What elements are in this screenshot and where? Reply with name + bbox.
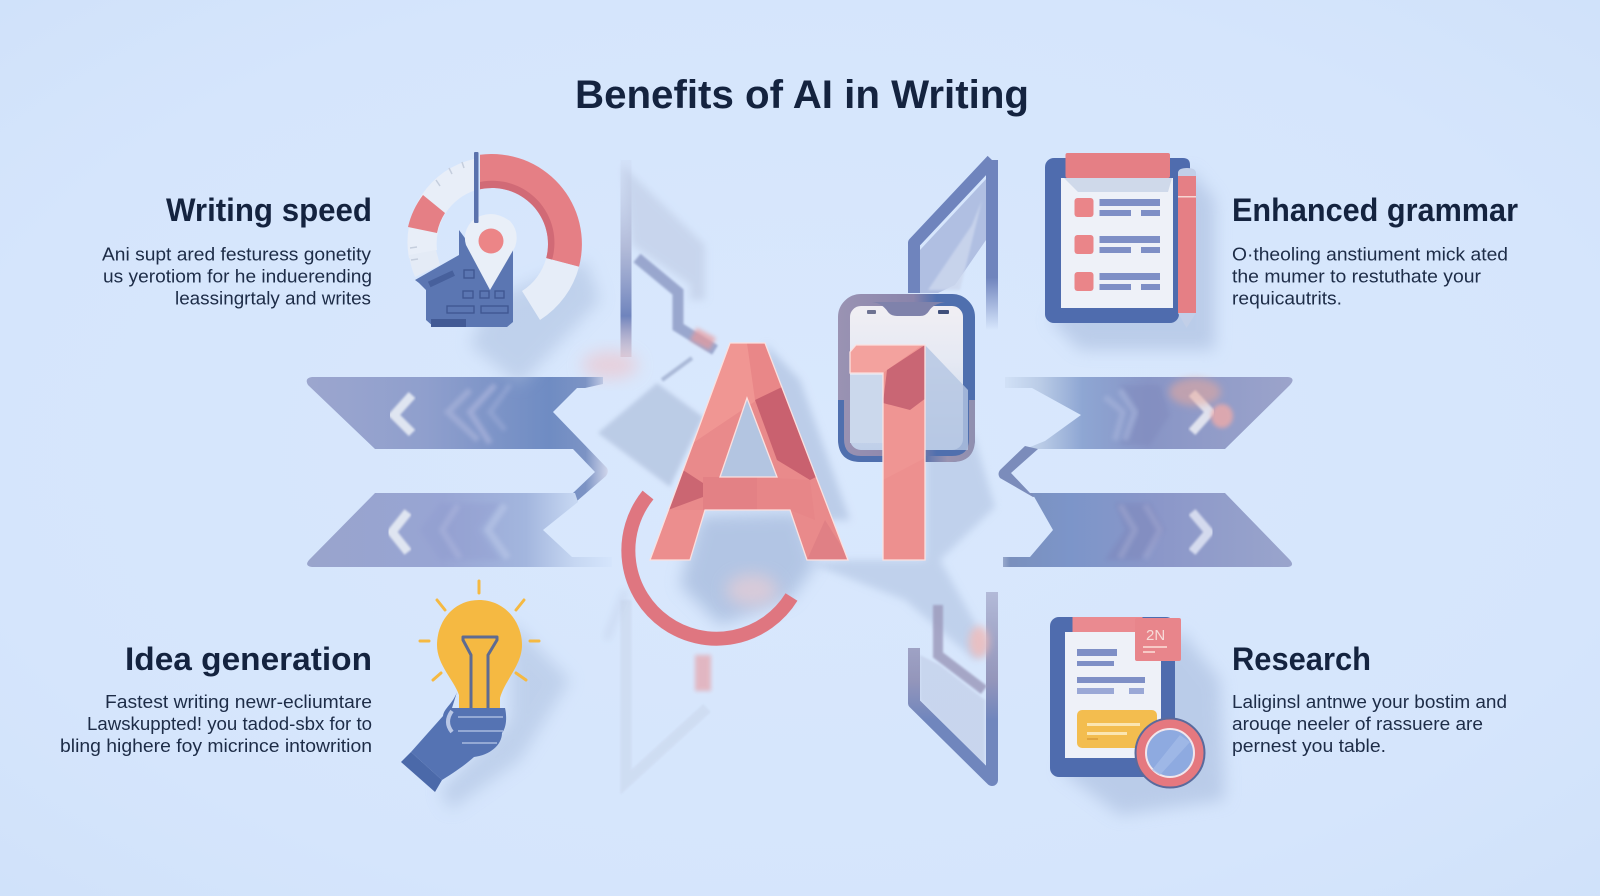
hand — [401, 692, 506, 792]
central diagram — [307, 160, 1293, 782]
checklist row 3 — [1074, 272, 1160, 291]
heading: Enhanced grammar — [1232, 192, 1518, 228]
bulb — [437, 600, 522, 710]
pencil — [1178, 168, 1196, 328]
description: arouqe neeler of rassuere are — [1232, 714, 1483, 734]
checklist row 1 — [1074, 198, 1160, 217]
map pin — [465, 214, 517, 290]
rays — [420, 581, 539, 680]
chevrons bottom right — [1105, 503, 1209, 560]
numeral 1 — [850, 343, 926, 560]
description: requicautrits. — [1232, 288, 1342, 308]
filament — [463, 637, 497, 708]
top right arrow band — [1005, 377, 1293, 449]
description: pernest you table. — [1232, 736, 1386, 756]
icon: speed gauge — [407, 152, 600, 385]
note tag: 2N — [1146, 627, 1165, 644]
panel: idea generation — [60, 581, 570, 810]
title: Benefits of AI in Writing — [575, 73, 1029, 117]
arrows: right — [998, 377, 1293, 567]
chevrons bottom left — [392, 503, 508, 560]
description — [1232, 244, 1508, 308]
description: leassingrtaly and writes — [175, 288, 371, 308]
yellow card — [1077, 710, 1157, 748]
heading: Idea generation — [125, 641, 372, 677]
letter A — [650, 343, 850, 560]
panel: writing speed — [102, 152, 600, 385]
magnifier — [1136, 718, 1204, 788]
heading: Research — [1232, 641, 1371, 677]
arrows: left — [307, 377, 612, 567]
note tag — [1135, 618, 1181, 661]
bottom right arrow band — [1003, 493, 1292, 567]
chevrons top left — [394, 385, 510, 443]
bracket: top right — [914, 160, 992, 330]
arc around A — [628, 495, 792, 639]
description — [60, 692, 372, 756]
description: us yerotiom for he induerending — [103, 266, 372, 286]
bracket: bottom left — [606, 590, 711, 782]
bracket: bottom right — [914, 592, 992, 780]
chevrons top right — [1105, 385, 1210, 445]
checklist row 2 — [1074, 235, 1160, 254]
glow spots — [1169, 378, 1233, 428]
description: Fastest writing newr-ecliumtare — [105, 692, 372, 712]
phone — [838, 300, 975, 462]
icon: hand holding light bulb — [401, 581, 570, 810]
description: Ani supt ared festuress gonetity — [102, 244, 371, 264]
icon: document with magnifier — [1050, 617, 1225, 815]
description — [1232, 692, 1507, 756]
description — [102, 244, 372, 308]
panel: research — [1050, 617, 1507, 815]
bracket: top left — [622, 160, 716, 380]
heading: Writing speed — [166, 192, 372, 228]
top left arrow band — [307, 377, 608, 501]
description: bling highere foy micrince intowrition — [60, 736, 372, 756]
icon: clipboard with pencil — [1045, 153, 1215, 350]
description: Lawskuppted! you tadod-sbx for to — [87, 714, 372, 734]
bottom left arrow band — [307, 493, 612, 567]
needle — [474, 152, 478, 223]
description: O·theoling anstiument mick ated — [1232, 244, 1508, 264]
panel: enhanced grammar — [1045, 153, 1518, 350]
long soft shadows behind AI — [582, 343, 995, 660]
description: Laliginsl antnwe your bostim and — [1232, 692, 1507, 712]
connector right — [998, 446, 1050, 497]
house block — [415, 230, 513, 327]
description: the mumer to restuthate your — [1232, 266, 1481, 286]
